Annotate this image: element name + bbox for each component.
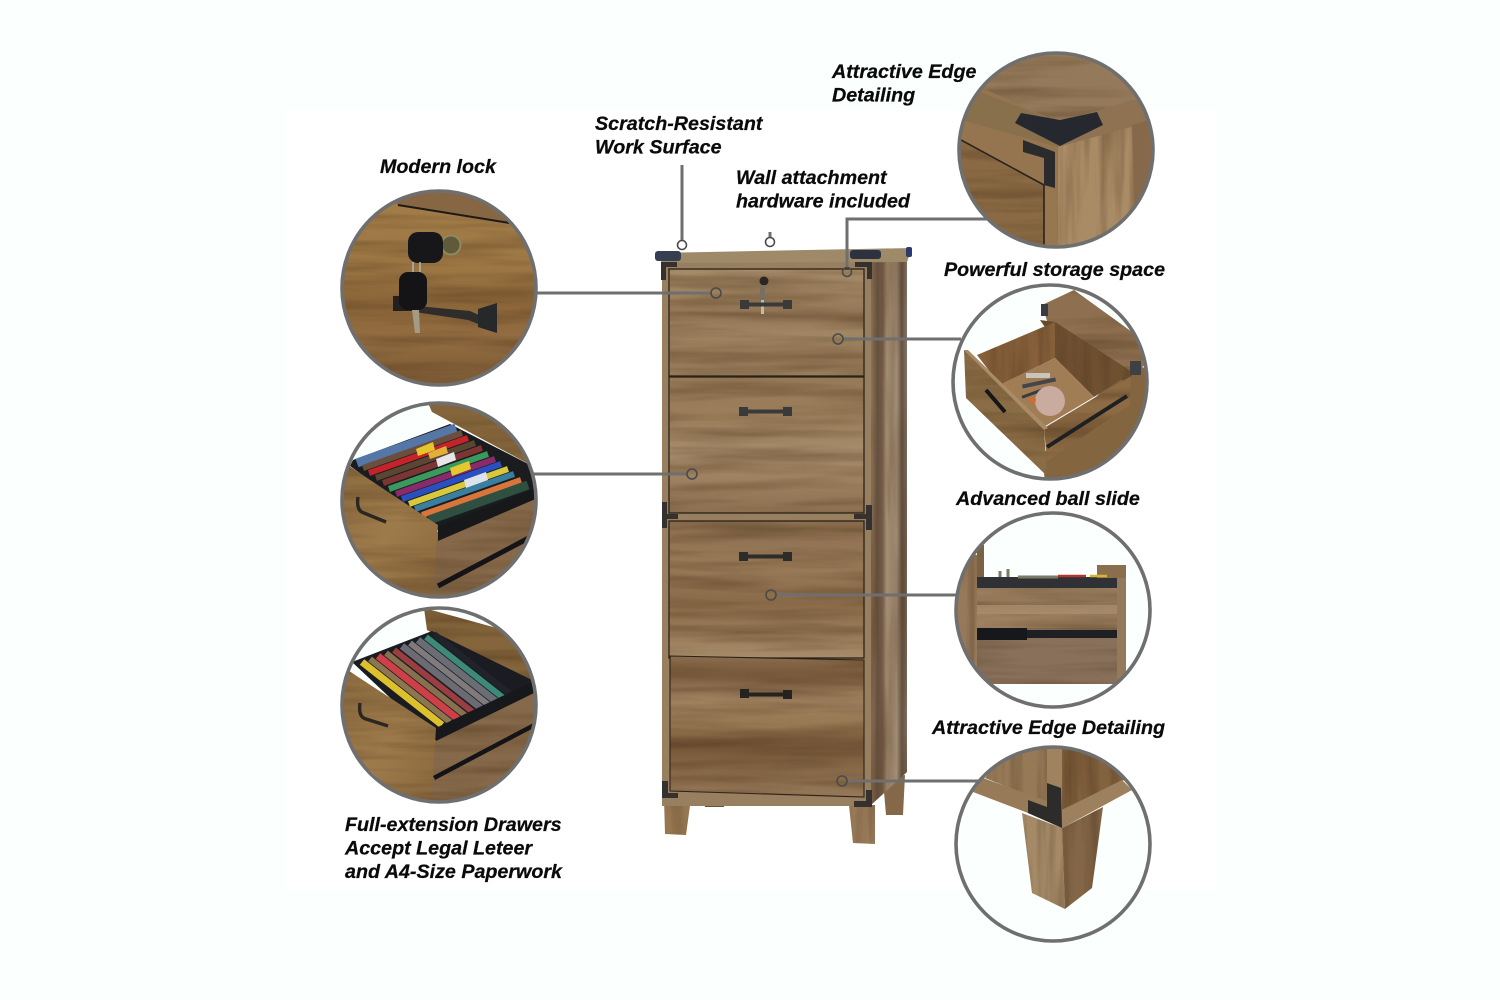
label: Powerful storage space [944,259,1165,281]
label: Attractive Edge Detailing [931,717,1165,739]
anchor dot [766,238,774,246]
connector line [847,219,987,267]
drawer handle [740,689,792,699]
label: Scratch-Resistant [595,113,764,135]
rear legs [703,775,905,815]
callout: modern lock [340,156,721,388]
drawer 4 [670,656,864,797]
photo: open drawer [964,290,1146,478]
anchor dot [766,590,776,600]
drawer handle [740,300,792,309]
anchor dot [837,776,847,786]
circle frame [342,403,536,597]
label: hardware included [736,190,911,212]
label: Modern lock [380,156,497,178]
cabinet [655,247,912,844]
circle frame [959,53,1153,247]
label: Wall attachment [736,167,888,189]
drawer handle [739,407,792,416]
anchor dot [678,240,686,250]
callout: top edge detailing [831,50,1157,276]
key lock [760,276,768,314]
anchor dot [833,334,843,344]
circle frame [956,513,1150,707]
connector line [680,165,684,240]
callout: scratch-resistant surface [595,113,764,250]
label: Accept Legal Leteer [344,838,533,860]
photo: top corner [955,50,1157,250]
label: Detailing [832,84,915,106]
callout: full-extension drawers [340,607,563,883]
anchor dot [687,469,697,479]
corner brackets [661,262,872,807]
connector line [537,292,711,294]
connector line [768,232,772,238]
front legs [664,798,875,844]
circle frame [342,608,536,802]
infographic canvas [340,51,1165,943]
drawer 2 [669,377,864,513]
top corner caps [655,247,912,261]
label: Attractive Edge [831,61,976,83]
cabinet front frame [662,256,871,806]
connector line [847,780,979,782]
circle frame [953,285,1147,479]
connector line [843,338,961,340]
photo: drawer with files [340,607,540,804]
photo: leg corner [973,748,1132,909]
callout: ball slide [766,488,1153,709]
label: Advanced ball slide [955,488,1140,510]
anchor dot [711,288,721,298]
white background panel [285,110,1215,890]
drawer 1 [669,269,864,376]
callout: wall attachment [736,167,911,246]
connector line [776,594,958,596]
photo: lock and key [340,190,540,388]
drawer handle [739,552,792,561]
label: Full-extension Drawers [345,814,562,836]
circle frame [956,747,1150,941]
cabinet top edge [656,248,912,263]
cabinet side panel [870,258,907,806]
callout: storage space [833,259,1165,482]
connector line [533,472,687,476]
circle frame [342,191,536,385]
callout: bottom edge detailing [837,717,1165,943]
label: and A4-Size Paperwork [345,861,563,883]
photo: drawer side rail [958,545,1126,684]
label: Work Surface [595,136,722,158]
callout: legal files drawer [340,403,697,598]
drawer 3 [669,521,864,658]
anchor dot [842,268,852,276]
photo: hanging files [340,403,540,598]
